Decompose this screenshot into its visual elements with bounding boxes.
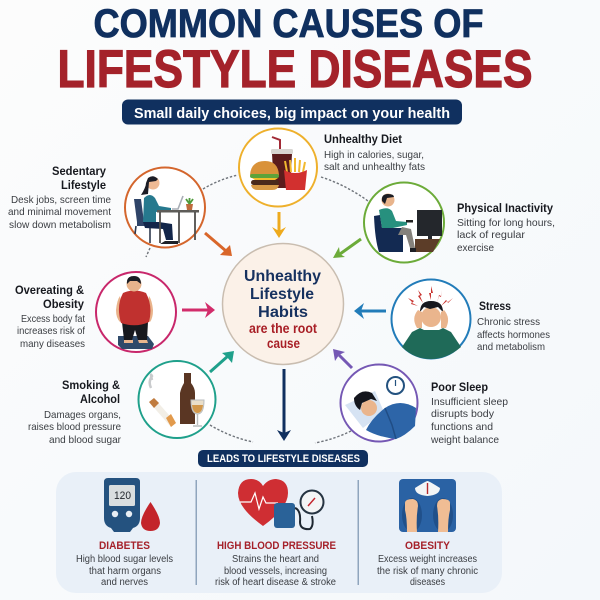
arrow: sleep to centre bbox=[333, 349, 352, 368]
title: COMMON CAUSES OF bbox=[94, 2, 484, 46]
label: poor sleep: functions and bbox=[431, 421, 493, 433]
label: smoking and alcohol: Smoking & bbox=[62, 380, 120, 392]
arrow: stress to centre bbox=[354, 303, 386, 319]
cause: stress bbox=[392, 280, 550, 359]
cause: unhealthy diet bbox=[239, 128, 425, 206]
label: unhealthy diet: Unhealthy Diet bbox=[324, 134, 402, 146]
label: obesity: Excess weight increases bbox=[378, 554, 477, 565]
icon: feet on bathroom scale bbox=[399, 479, 456, 532]
cause: physical inactivity bbox=[364, 182, 555, 262]
label: poor sleep: Poor Sleep bbox=[431, 382, 488, 394]
central circle: unhealthy lifestyle habits: Habits bbox=[258, 304, 308, 321]
label: diabetes bbox=[76, 540, 173, 588]
label: sedentary lifestyle: Lifestyle bbox=[61, 180, 106, 192]
label: sedentary lifestyle: Desk jobs, screen time bbox=[11, 194, 111, 206]
arrow: smoking to centre bbox=[210, 351, 234, 372]
central circle: unhealthy lifestyle habits: cause bbox=[267, 336, 300, 351]
label: smoking and alcohol: Damages organs, bbox=[44, 409, 121, 421]
label: diabetes: and nerves bbox=[101, 577, 148, 588]
label: physical inactivity: Sitting for long hours, bbox=[457, 217, 555, 229]
cause: overeating and obesity bbox=[15, 272, 176, 352]
cause: sedentary lifestyle bbox=[8, 166, 205, 248]
icon: man watching TV on sofa bbox=[364, 182, 444, 262]
subtitle banner bbox=[122, 100, 462, 124]
label: unhealthy diet: High in calories, sugar, bbox=[324, 149, 424, 161]
label: high blood pressure: risk of heart disease & stroke bbox=[215, 577, 336, 588]
label: smoking and alcohol: raises blood pressure bbox=[28, 421, 121, 433]
label: stress bbox=[477, 301, 550, 353]
label: poor sleep bbox=[430, 382, 508, 446]
label: obesity bbox=[377, 540, 478, 588]
label: poor sleep: weight balance bbox=[430, 434, 499, 446]
label: overeating and obesity bbox=[15, 285, 85, 350]
label: sedentary lifestyle: Sedentary bbox=[52, 166, 107, 178]
label: sedentary lifestyle: and minimal movement bbox=[8, 206, 111, 218]
arrow: inactivity to centre bbox=[333, 239, 361, 258]
title bbox=[58, 2, 532, 99]
label: diabetes: that harm organs bbox=[89, 566, 161, 577]
label: physical inactivity: Physical Inactivity bbox=[457, 203, 554, 215]
disease: diabetes bbox=[76, 478, 173, 588]
icon: burger, drink and fries bbox=[239, 128, 317, 206]
cause: poor sleep bbox=[340, 364, 508, 446]
label: high blood pressure: HIGH BLOOD PRESSURE bbox=[217, 540, 336, 552]
label: poor sleep: disrupts body bbox=[431, 408, 495, 420]
disease: high blood pressure bbox=[215, 479, 336, 588]
label: stress: affects hormones bbox=[477, 329, 550, 341]
label: diabetes: High blood sugar levels bbox=[76, 554, 173, 565]
label: high blood pressure: Strains the heart and bbox=[232, 554, 319, 565]
icon: glucose meter and blood drop: 120 bbox=[114, 490, 131, 502]
label: unhealthy diet: salt and unhealthy fats bbox=[324, 161, 425, 173]
label: sedentary lifestyle: slow down metabolism bbox=[9, 219, 111, 231]
icon: overweight man on scale bbox=[96, 272, 176, 352]
central circle: unhealthy lifestyle habits: Unhealthy bbox=[244, 268, 321, 285]
label: physical inactivity: lack of regular bbox=[457, 229, 526, 241]
label: physical inactivity bbox=[457, 203, 555, 254]
dotted connector ring bbox=[146, 175, 368, 443]
label: overeating and obesity: Obesity bbox=[43, 299, 85, 311]
cause: smoking and alcohol bbox=[28, 361, 216, 446]
central circle: unhealthy lifestyle habits: are the root bbox=[249, 321, 317, 336]
label: high blood pressure bbox=[215, 540, 336, 588]
arrow: diet to centre bbox=[272, 212, 286, 238]
icon: heart, cuff and gauge bbox=[238, 479, 324, 529]
label: unhealthy diet bbox=[324, 134, 425, 173]
icon: cigarette, bottle and glass bbox=[138, 361, 216, 438]
label: smoking and alcohol: and blood sugar bbox=[49, 434, 121, 446]
label: smoking and alcohol: Alcohol bbox=[80, 394, 120, 406]
label: stress: Stress bbox=[479, 301, 511, 313]
label: sedentary lifestyle bbox=[8, 166, 111, 231]
label: overeating and obesity: many diseases bbox=[20, 338, 85, 350]
label: high blood pressure: blood vessels, increasing bbox=[224, 566, 327, 577]
label: overeating and obesity: Overeating & bbox=[15, 285, 84, 297]
central circle: unhealthy lifestyle habits bbox=[222, 244, 344, 364]
label: stress: and metabolism bbox=[477, 341, 545, 353]
label: poor sleep: Insufficient sleep bbox=[431, 396, 508, 408]
central circle: unhealthy lifestyle habits: Lifestyle bbox=[250, 286, 314, 303]
label: smoking and alcohol bbox=[28, 380, 121, 446]
label: overeating and obesity: increases risk of bbox=[17, 325, 85, 337]
arrow: overeating to centre bbox=[182, 302, 215, 318]
label: physical inactivity: exercise bbox=[457, 242, 494, 254]
disease: obesity bbox=[377, 479, 478, 588]
icon: man sleeping with clock bbox=[340, 364, 418, 442]
subtitle banner: Small daily choices, big impact on your health bbox=[134, 106, 450, 122]
heading banner: leads to lifestyle diseases bbox=[198, 450, 368, 467]
heading banner: leads to lifestyle diseases: LEADS TO LIFESTYLE DISEASES bbox=[207, 453, 360, 465]
panel: lifestyle diseases bbox=[56, 450, 502, 593]
label: obesity: the risk of many chronic bbox=[377, 566, 478, 577]
label: obesity: OBESITY bbox=[405, 540, 451, 552]
label: stress: Chronic stress bbox=[477, 316, 540, 328]
arrow: centre to diseases bbox=[277, 369, 291, 441]
label: obesity: diseases bbox=[410, 577, 445, 588]
icon: person at desk with laptop bbox=[125, 168, 205, 248]
label: overeating and obesity: Excess body fat bbox=[21, 313, 85, 325]
icon: stressed man holding head bbox=[392, 280, 470, 359]
label: diabetes: DIABETES bbox=[99, 540, 150, 552]
arrow: sedentary to centre bbox=[205, 233, 232, 256]
